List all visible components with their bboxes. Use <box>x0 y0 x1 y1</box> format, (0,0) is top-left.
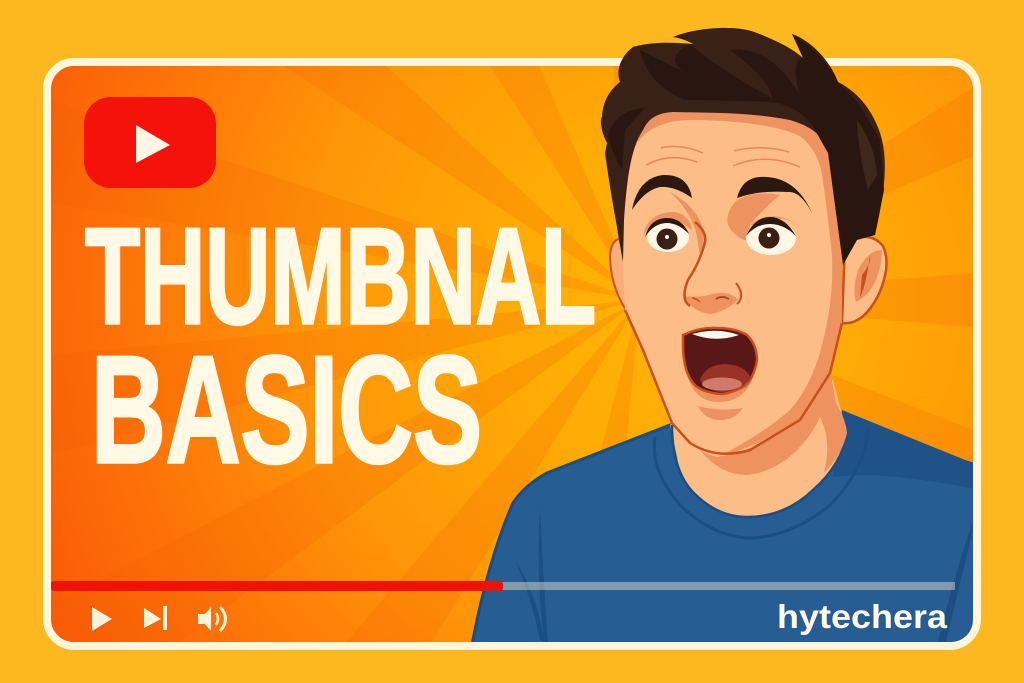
neck <box>670 380 847 517</box>
title: THUMBNAL BASICS <box>85 200 596 495</box>
collar inner edge <box>672 425 848 517</box>
head <box>622 106 842 457</box>
mouth <box>683 328 757 402</box>
video frame panel <box>47 62 977 646</box>
chin shadow <box>698 406 743 420</box>
neck shadow <box>700 370 847 475</box>
eye: right <box>746 217 796 255</box>
eye shadow <box>643 192 797 255</box>
title: THUMBNAL BASICS: BASICS <box>91 325 482 495</box>
jaw outline <box>625 310 842 454</box>
title: THUMBNAL BASICS: THUMBNAL <box>85 200 596 352</box>
ear: right <box>842 237 887 323</box>
icon: YouTube logo <box>84 97 216 188</box>
forehead wrinkles <box>646 146 800 167</box>
icon: volume <box>198 607 226 631</box>
face shadow <box>638 106 842 455</box>
brand label: hytechera <box>777 598 948 635</box>
shirt <box>472 410 980 645</box>
eyebrows <box>632 175 812 213</box>
eye: left <box>645 218 689 252</box>
ear: left <box>610 239 626 310</box>
progress bar <box>51 581 955 591</box>
icon: play <box>92 607 112 631</box>
hair <box>601 28 885 265</box>
icon: next <box>144 606 167 630</box>
nose <box>684 222 741 314</box>
